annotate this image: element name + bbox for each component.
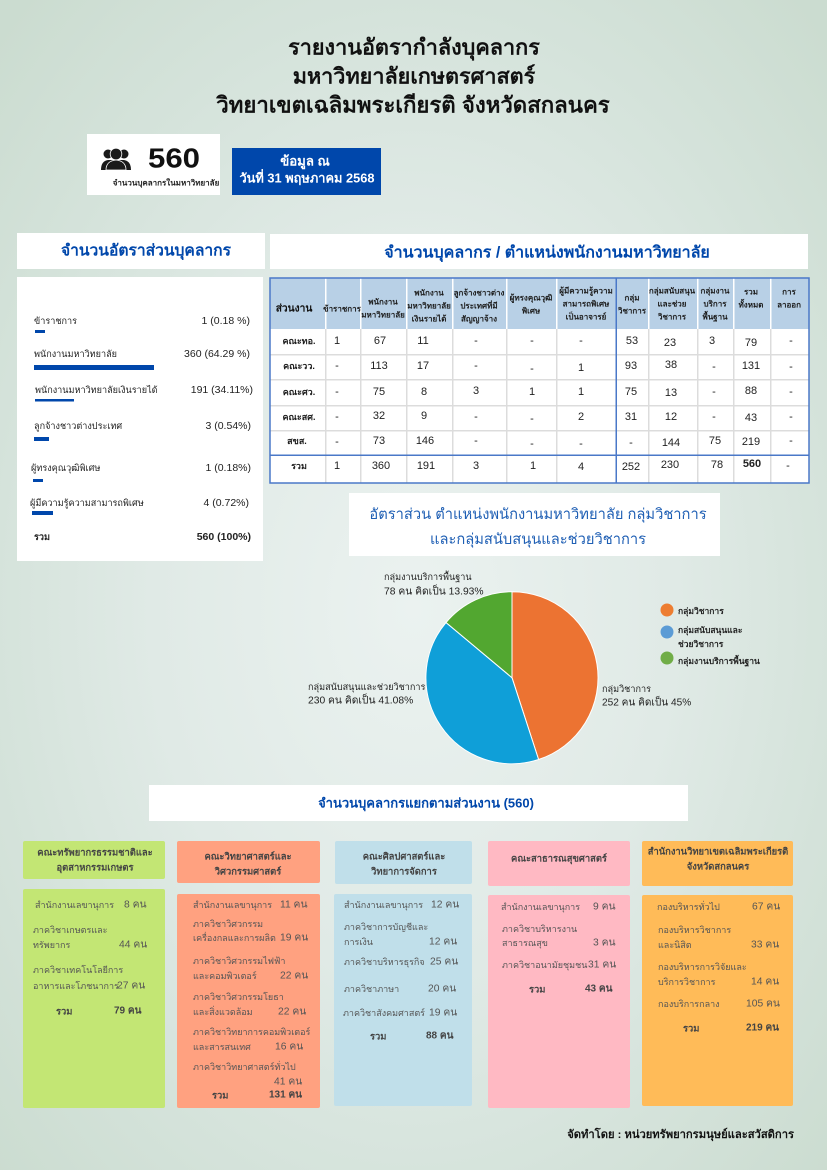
table row: total: 360 — [372, 460, 390, 472]
table row: สขส.: - — [335, 436, 339, 448]
card: natural resources faculty: ทรัพยากร — [33, 940, 70, 950]
row: special experts: 1 (0.18%) — [205, 462, 251, 474]
card: natural resources faculty: อาหารและโภชนาการ — [33, 981, 119, 991]
row: special talent: ผู้มีความรู้ความสามารถพิเศษ — [30, 498, 144, 509]
card: science and engineering faculty: คณะวิทยาศาสตร์และ — [204, 850, 292, 862]
table row: คณะศว.: 8 — [421, 386, 427, 398]
table row: total: 1 — [334, 460, 340, 472]
table header: และช่วย — [658, 300, 687, 308]
card: science and engineering faculty: 11 คน — [280, 900, 307, 910]
table row: คณะทอ.: 67 — [374, 335, 386, 347]
table row: คณะศว.: 3 — [473, 385, 479, 397]
table row: คณะศว.: คณะศว. — [283, 387, 315, 397]
table row: คณะวว.: - — [335, 360, 339, 372]
table row: คณะศว.: - — [712, 386, 716, 398]
title: รายงานอัตรากำลังบุคลากร — [288, 34, 540, 62]
table row: คณะวว.: คณะวว. — [283, 361, 315, 371]
card: public health faculty: สำนักงานเลขานุการ — [501, 902, 580, 913]
table row: คณะศว. — [283, 385, 793, 399]
table row: total: 78 — [711, 459, 723, 471]
row: foreign employees: ลูกจ้างชาวต่างประเทศ — [34, 421, 122, 432]
table row: คณะสค.: 31 — [625, 411, 637, 423]
card: natural resources faculty: คณะทรัพยากรธรรมชาติและ — [37, 846, 153, 858]
table row: คณะวว.: 17 — [417, 360, 429, 372]
table row: สขส.: 144 — [662, 437, 680, 449]
table row: คณะวว. — [283, 359, 793, 375]
date box — [232, 148, 381, 195]
card: liberal arts and management faculty: สำนักงานเลขานุการ — [344, 900, 423, 911]
table header: ผู้ทรงคุณวุฒิ — [510, 292, 552, 304]
row: civil servants — [34, 315, 250, 333]
table header: กลุ่มงาน — [701, 286, 730, 296]
table row: คณะสค.: 43 — [745, 412, 757, 424]
card: liberal arts and management faculty: รวม — [370, 1030, 386, 1042]
icon: people — [101, 148, 131, 170]
pie legend: ช่วยวิชาการ — [678, 639, 724, 649]
card: liberal arts and management faculty: 25 คน — [430, 956, 458, 968]
row: foreign employees: 3 (0.54%) — [205, 420, 251, 432]
card: natural resources faculty: ภาควิชาเกษตรและ — [33, 925, 108, 935]
card: liberal arts and management faculty: คณะศิลปศาสตร์และ — [363, 850, 445, 862]
table row: คณะศว.: - — [335, 386, 339, 398]
card: campus office: 14 คน — [751, 976, 779, 988]
card: public health faculty: 31 คน — [588, 960, 616, 970]
title: วิทยาเขตเฉลิมพระเกียรติ จังหวัดสกลนคร — [216, 92, 610, 118]
total staff card — [87, 134, 220, 195]
table header: เงินรายได้ — [412, 314, 446, 324]
table row: สขส. — [287, 435, 793, 450]
table row: คณะทอ.: - — [789, 335, 793, 347]
table row: คณะทอ.: 11 — [417, 335, 429, 347]
card: public health faculty: สาธารณสุข — [502, 938, 548, 949]
card: liberal arts and management faculty: วิทยาการจัดการ — [370, 866, 438, 876]
table header: การ — [782, 288, 797, 296]
table row: คณะทอ.: 1 — [334, 335, 340, 347]
card: science and engineering faculty: และสิ่งแวดล้อม — [193, 1005, 253, 1017]
table row: สขส.: - — [474, 435, 478, 447]
table header: ประเทศที่มี — [460, 300, 498, 310]
pie legend: กลุ่มวิชาการ — [678, 606, 724, 617]
card: natural resources faculty — [23, 841, 165, 1108]
table row: สขส.: 75 — [709, 435, 721, 447]
card: liberal arts and management faculty: 12 คน — [429, 936, 457, 948]
table row: คณะวว.: 131 — [742, 360, 760, 372]
table row: total — [291, 458, 790, 473]
date box: วันที่ 31 พฤษภาคม 2568 — [240, 168, 374, 186]
table header: วิชาการ — [657, 312, 687, 322]
card: liberal arts and management faculty: 19 คน — [429, 1008, 457, 1018]
table row: สขส.: 146 — [416, 435, 434, 447]
row: total: รวม — [34, 532, 50, 542]
card: liberal arts and management faculty: ภาควิชาภาษา — [344, 984, 399, 994]
card: natural resources faculty: ภาควิชาเทคโนโลยีการ — [33, 965, 123, 975]
table header: บริการ — [703, 300, 727, 308]
card: science and engineering faculty: 22 คน — [280, 970, 308, 982]
card: science and engineering faculty: 19 คน — [280, 932, 308, 944]
table header: พื้นฐาน — [702, 310, 728, 322]
card: campus office: และนิสิต — [658, 940, 692, 950]
card: campus office: 105 คน — [746, 998, 780, 1010]
pie chart — [426, 592, 598, 764]
pie label: academic — [602, 684, 691, 708]
card: liberal arts and management faculty: การเงิน — [344, 937, 373, 947]
table row: total: 4 — [578, 461, 584, 473]
pie heading: อัตราส่วน ตำแหน่งพนักงานมหาวิทยาลัย กลุ่มวิชาการ — [369, 507, 707, 523]
table row: คณะทอ.: 23 — [664, 337, 676, 349]
card: natural resources faculty: รวม — [56, 1006, 72, 1016]
table row: คณะวว.: - — [789, 361, 793, 373]
table row: คณะวว.: 113 — [370, 360, 388, 372]
table row: คณะวว.: - — [712, 361, 716, 373]
card: campus office: รวม — [683, 1022, 699, 1034]
card: natural resources faculty: อุตสาหกรรมเกษตร — [56, 862, 134, 874]
card: science and engineering faculty: ภาควิชาวิศวกรรมโยธา — [193, 992, 284, 1002]
panel heading: staff ratio: จำนวนอัตราส่วนบุคลากร — [61, 242, 232, 260]
table row: สขส.: - — [789, 435, 793, 447]
table row: คณะสค.: - — [335, 411, 339, 423]
row: special talent — [30, 497, 249, 515]
table row: คณะทอ.: 53 — [626, 335, 638, 347]
table header: กลุ่ม — [624, 294, 640, 304]
table header: มหาวิทยาลัย — [407, 302, 451, 310]
staff table — [270, 278, 809, 483]
card: science and engineering faculty: ภาควิชาวิศวกรรมไฟฟ้า — [193, 956, 285, 966]
card: campus office: กองบริหารทั่วไป — [657, 900, 720, 912]
table row: คณะสค.: - — [474, 411, 478, 423]
table row: คณะศว.: 88 — [745, 385, 757, 397]
card: public health faculty: คณะสาธารณสุขศาสตร์ — [511, 852, 608, 864]
card: science and engineering faculty: ภาควิชาวิทยาการคอมพิวเตอร์ — [193, 1026, 311, 1037]
table header: สัญญาจ้าง — [461, 314, 497, 324]
card: science and engineering faculty: รวม — [212, 1090, 228, 1100]
row: total: 560 (100%) — [197, 531, 251, 543]
row: foreign employees — [34, 420, 251, 441]
card: science and engineering faculty: ภาควิชาวิทยาศาสตร์ทั่วไป — [193, 1060, 296, 1072]
table row: คณะศว.: 13 — [665, 387, 677, 399]
table row: คณะสค. — [283, 410, 793, 425]
pie label: basic services — [384, 570, 484, 598]
card: campus office: กองบริหารวิชาการ — [658, 925, 731, 935]
table row: คณะสค.: - — [789, 411, 793, 423]
total staff card: 560 — [148, 142, 200, 174]
table row: สขส.: 219 — [742, 436, 760, 448]
table row: คณะสค.: 12 — [665, 411, 677, 423]
table header: ส่วนงาน — [276, 302, 312, 314]
card: liberal arts and management faculty: 12 คน — [431, 900, 459, 910]
card: science and engineering faculty: 41 คน — [274, 1076, 302, 1088]
card: liberal arts and management faculty: ภาควิชาการบัญชีและ — [344, 922, 428, 932]
card: public health faculty: ภาควิชาบริหารงาน — [502, 924, 577, 934]
table row: คณะวว.: 93 — [625, 360, 637, 372]
card: science and engineering faculty — [177, 841, 320, 1108]
row: income-funded staff: พนักงานมหาวิทยาลัยเงินรายได้ — [35, 385, 158, 395]
pie label: support — [308, 682, 426, 706]
table row: total: 191 — [417, 460, 435, 472]
card: science and engineering faculty: ภาควิชาวิศวกรรม — [193, 919, 263, 929]
row: university staff — [34, 348, 250, 370]
title — [216, 34, 610, 118]
table header: พิเศษ — [522, 306, 541, 316]
card: campus office: 67 คน — [752, 902, 780, 912]
date box: ข้อมูล ณ — [280, 154, 330, 170]
pie label: academic: 252 คน คิดเป็น 45% — [602, 694, 691, 708]
card: campus office: กองบริหารการวิจัยและ — [658, 962, 747, 972]
total staff card: จำนวนบุคลากรในมหาวิทยาลัย — [113, 178, 220, 188]
pie heading — [349, 493, 720, 556]
card: liberal arts and management faculty — [334, 841, 472, 1106]
pie label: basic services: กลุ่มงานบริการพื้นฐาน — [384, 570, 472, 583]
table header: พนักงาน — [414, 288, 444, 298]
card: natural resources faculty: 27 คน — [117, 980, 145, 992]
pie legend: กลุ่มงานบริการพื้นฐาน — [678, 654, 760, 667]
card: science and engineering faculty: เครื่องกลและการผลิต — [193, 931, 276, 943]
table row: สขส.: - — [530, 438, 534, 450]
table header: ลูกจ้างชาวต่าง — [454, 288, 505, 298]
panel heading: staff ratio — [17, 233, 265, 269]
table header: สามารถพิเศษ — [563, 300, 610, 308]
table header — [276, 286, 801, 324]
pie legend — [660, 604, 760, 667]
card: natural resources faculty: 8 คน — [124, 900, 147, 910]
card: natural resources faculty: 44 คน — [119, 940, 147, 950]
row: income-funded staff: 191 (34.11%) — [191, 384, 253, 396]
card: campus office: สำนักงานวิทยาเขตเฉลิมพระเกียรติ — [648, 846, 788, 856]
table row: คณะสค.: คณะสศ. — [283, 412, 315, 422]
section heading: จำนวนบุคลากรแยกตามส่วนงาน (560) — [318, 796, 534, 812]
table header: รวม — [744, 288, 758, 296]
section heading — [149, 785, 688, 821]
card: liberal arts and management faculty: 88 คน — [426, 1030, 454, 1042]
table header: วิชาการ — [617, 306, 647, 316]
table row: คณะทอ.: - — [530, 335, 534, 347]
table header: ทั้งหมด — [739, 298, 763, 310]
table row: total: รวม — [291, 461, 307, 471]
table row: คณะวว.: 38 — [665, 359, 677, 371]
card: science and engineering faculty: และคอมพิวเตอร์ — [193, 970, 257, 981]
table header: กลุ่มสนับสนุน — [649, 286, 696, 296]
row: income-funded staff — [35, 384, 253, 402]
card: liberal arts and management faculty: 20 คน — [428, 984, 456, 994]
table row: คณะสค.: 32 — [373, 410, 385, 422]
pie label: academic: กลุ่มวิชาการ — [602, 684, 651, 695]
card: campus office — [642, 841, 793, 1106]
card: science and engineering faculty: 16 คน — [275, 1042, 303, 1052]
row: civil servants: 1 (0.18 %) — [202, 315, 250, 327]
row: total — [34, 531, 251, 543]
row: special talent: 4 (0.72%) — [203, 497, 249, 509]
table row: total: 1 — [530, 460, 536, 472]
card: campus office: กองบริการกลาง — [658, 999, 720, 1009]
table row: คณะวว.: - — [530, 363, 534, 375]
pie heading: และกลุ่มสนับสนุนและช่วยวิชาการ — [430, 532, 646, 548]
card: natural resources faculty: 79 คน — [114, 1006, 142, 1016]
card: public health faculty: 9 คน — [593, 902, 616, 912]
table row: คณะทอ.: - — [579, 335, 583, 347]
card: campus office: 33 คน — [751, 940, 779, 950]
table row: คณะศว.: 1 — [578, 386, 584, 398]
table row: คณะทอ.: 79 — [745, 337, 757, 349]
panel heading: staff table: จำนวนบุคลากร / ตำแหน่งพนักงานมหาวิทยาลัย — [384, 244, 710, 262]
table row: total: 252 — [622, 461, 640, 473]
row: special experts — [31, 462, 251, 482]
table row: total: - — [786, 460, 790, 472]
table row: คณะสค.: - — [530, 413, 534, 425]
table header: ผู้มีความรู้ความ — [559, 286, 613, 296]
title: มหาวิทยาลัยเกษตรศาสตร์ — [293, 64, 536, 88]
table header: พนักงาน — [368, 298, 398, 306]
card: liberal arts and management faculty: ภาควิชาสังคมศาสตร์ — [343, 1007, 425, 1018]
card: public health faculty: ภาควิชาอนามัยชุมชน — [502, 960, 587, 971]
card: science and engineering faculty: วิศวกรรมศาสตร์ — [214, 866, 282, 876]
card: science and engineering faculty: และสารสนเทศ — [193, 1042, 251, 1052]
table row: คณะศว.: 1 — [529, 386, 535, 398]
card: campus office: จังหวัดสกลนคร — [687, 860, 750, 872]
table header: ข้าราชการ — [323, 304, 362, 314]
table row: คณะทอ.: 3 — [709, 335, 715, 347]
card: science and engineering faculty: สำนักงานเลขานุการ — [193, 900, 272, 911]
pie label: support: กลุ่มสนับสนุนและช่วยวิชาการ — [308, 682, 426, 693]
table row: คณะทอ.: - — [474, 335, 478, 347]
row: special experts: ผู้ทรงคุณวุฒิพิเศษ — [31, 463, 100, 474]
table row: คณะสค.: 9 — [421, 410, 427, 422]
table row: total: 230 — [661, 459, 679, 471]
pie label: basic services: 78 คน คิดเป็น 13.93% — [384, 584, 484, 598]
card: natural resources faculty: สำนักงานเลขานุการ — [35, 900, 114, 911]
table header: เป็นอาจารย์ — [566, 310, 607, 322]
table row: คณะสค.: - — [712, 411, 716, 423]
footer credit: จัดทำโดย : หน่วยทรัพยากรมนุษย์และสวัสดิการ — [567, 1127, 794, 1142]
table row: คณะศว.: 75 — [373, 386, 385, 398]
row: university staff: พนักงานมหาวิทยาลัย — [34, 349, 117, 359]
card: liberal arts and management faculty: ภาควิชาบริหารธุรกิจ — [344, 957, 425, 968]
card: public health faculty — [488, 841, 630, 1108]
table row: คณะวว.: - — [474, 360, 478, 372]
table row: สขส.: สขส. — [287, 436, 307, 446]
row: university staff: 360 (64.29 %) — [184, 348, 250, 360]
table row: สขส.: - — [629, 437, 633, 449]
table header: ลาออก — [777, 300, 801, 310]
table row: คณะศว.: - — [789, 386, 793, 398]
table row: total: 3 — [473, 460, 479, 472]
table row: สขส.: 73 — [373, 435, 385, 447]
row: civil servants: ข้าราชการ — [34, 316, 77, 326]
table row: คณะศว.: 75 — [625, 386, 637, 398]
panel: staff ratio list — [17, 277, 263, 561]
table row: คณะสค.: 2 — [578, 411, 584, 423]
table row: คณะทอ.: คณะทอ. — [282, 336, 316, 346]
pie label: support: 230 คน คิดเป็น 41.08% — [308, 692, 413, 706]
table row: สขส.: - — [579, 438, 583, 450]
card: public health faculty: 3 คน — [593, 938, 616, 948]
card: public health faculty: รวม — [529, 984, 545, 994]
table row: คณะทอ. — [282, 335, 793, 349]
table header: มหาวิทยาลัย — [361, 310, 405, 320]
card: science and engineering faculty: 131 คน — [269, 1090, 302, 1100]
card: science and engineering faculty: 22 คน — [278, 1006, 306, 1018]
card: campus office: บริการวิชาการ — [658, 977, 716, 987]
pie legend: กลุ่มสนับสนุนและ — [678, 625, 742, 636]
card: campus office: 219 คน — [746, 1022, 779, 1034]
card: public health faculty: 43 คน — [585, 984, 613, 994]
panel heading: staff table — [270, 234, 808, 269]
table row: คณะวว.: 1 — [578, 362, 584, 374]
table row: total: 560 — [743, 458, 761, 470]
